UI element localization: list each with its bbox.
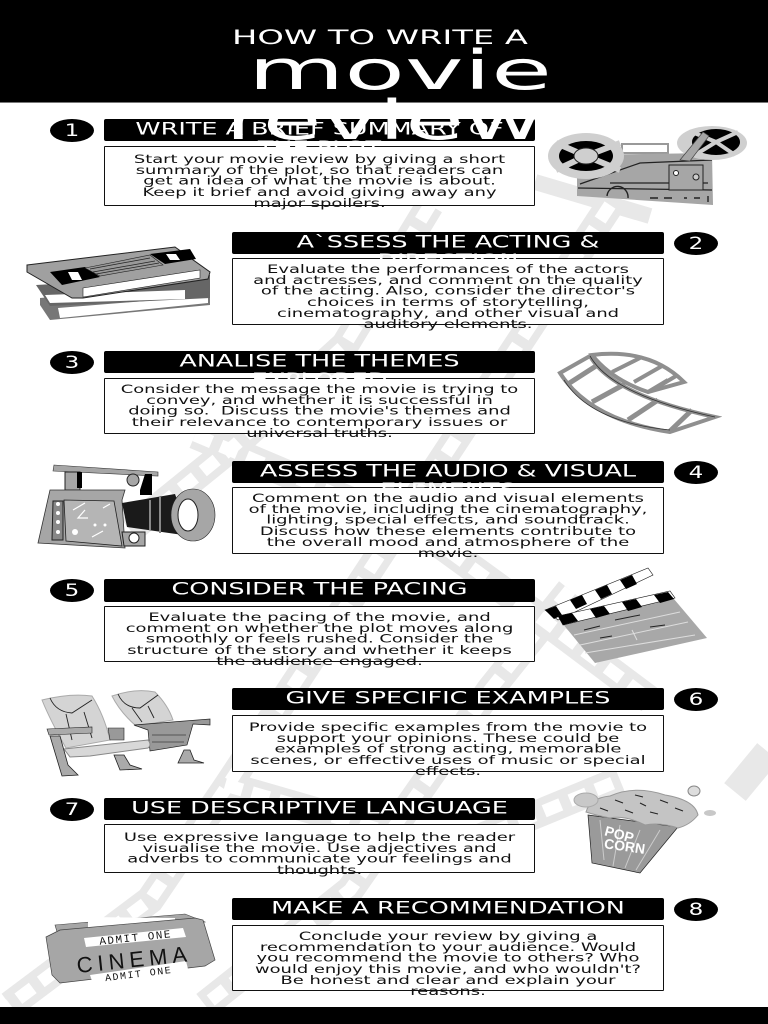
header band bbox=[0, 0, 768, 103]
step 5 number bbox=[50, 579, 94, 602]
step 4 body box bbox=[232, 487, 664, 554]
step 7 number: 7 bbox=[65, 800, 79, 819]
step 2 heading bbox=[296, 233, 599, 270]
step 5 bar bbox=[104, 579, 535, 602]
icon: video camera bbox=[38, 464, 216, 548]
step 7 text bbox=[124, 830, 516, 877]
step 2 text bbox=[253, 262, 643, 331]
step 6 text: scenes, or effective uses of music or special bbox=[250, 753, 646, 767]
step 4 text: the overall mood and atmosphere of the bbox=[267, 535, 629, 549]
step 4 number: 4 bbox=[689, 463, 703, 482]
step 1 heading: THE PLOT bbox=[258, 138, 381, 157]
step 3 text: Consider the message the movie is trying to bbox=[121, 382, 518, 396]
step 3 bar bbox=[104, 351, 535, 373]
step 8 number: 8 bbox=[689, 900, 703, 919]
step 7 text: thoughts. bbox=[277, 863, 362, 877]
step 3 number: 3 bbox=[65, 353, 79, 372]
step 8 text: Be honest and clear and explain your bbox=[281, 973, 615, 987]
step 4 heading: ASSESS THE AUDIO & VISUAL bbox=[260, 462, 636, 481]
popcorn label bbox=[603, 823, 646, 857]
step 6 panel: give specific examples bbox=[232, 688, 718, 778]
step 8 body box bbox=[232, 925, 664, 991]
step 3 text: doing so. Discuss the movie's themes and bbox=[128, 404, 511, 418]
step 6 number: 6 bbox=[689, 690, 703, 709]
step 2 text: Evaluate the performances of the actors bbox=[267, 262, 629, 276]
step 7 body box bbox=[104, 824, 535, 873]
step 1 number: 1 bbox=[65, 121, 79, 140]
step 4 text: of the movie, including the cinematography, bbox=[249, 502, 647, 516]
icon: cinema tickets bbox=[46, 914, 216, 985]
step 2 heading: DIRECTION bbox=[377, 251, 519, 270]
step 8 text bbox=[255, 929, 641, 998]
step 1 number bbox=[50, 119, 94, 142]
step 6 number bbox=[674, 688, 718, 711]
step 2 number: 2 bbox=[689, 234, 703, 253]
step 5 body box bbox=[104, 606, 535, 662]
step 7 heading: USE DESCRIPTIVE LANGUAGE bbox=[131, 799, 508, 818]
step 2 body box bbox=[232, 258, 664, 325]
step 7 text: adverbs to communicate your feelings and bbox=[127, 852, 512, 866]
step 5 text: the audience engaged. bbox=[216, 654, 423, 668]
step 1 text bbox=[134, 152, 505, 210]
step 6 text: examples of strong acting, memorable bbox=[275, 742, 621, 756]
step 2 text: cinematography, and other visual and bbox=[277, 306, 619, 320]
icon: curled film reel strip bbox=[557, 352, 722, 434]
step 1 text: Start your movie review by giving a short bbox=[134, 152, 505, 166]
step 3 text: universal truths. bbox=[246, 426, 393, 440]
step 2 text: and actresses, and comment on the quality bbox=[253, 273, 643, 287]
step 1 text: get an idea of what the movie is about. bbox=[143, 174, 496, 188]
step 8 heading: MAKE A RECOMMENDATION bbox=[271, 899, 625, 918]
step 7 text: visualise the movie. Use adjectives and bbox=[142, 841, 496, 855]
step 2 heading: A`SSESS THE ACTING & bbox=[297, 233, 599, 252]
ticket lower text: ADMIT ONE bbox=[105, 966, 173, 985]
step 2 text: choices in terms of storytelling, bbox=[307, 295, 589, 309]
step 6 body box bbox=[232, 715, 664, 772]
step 5 text: Evaluate the pacing of the movie, and bbox=[148, 610, 491, 624]
step 3 heading: ANALISE THE THEMES bbox=[179, 352, 460, 371]
step 8 bar bbox=[232, 898, 664, 920]
popcorn label: CORN bbox=[603, 835, 646, 857]
step 4 text: movie. bbox=[418, 546, 478, 560]
step 2 text: auditory elements. bbox=[363, 317, 532, 331]
step 1 heading: WRITE A BRIEF SUMMARY OF bbox=[135, 120, 504, 139]
title bbox=[225, 26, 552, 152]
step 4 number bbox=[674, 461, 718, 484]
step 3 text: their relevance to contemporary issues or bbox=[132, 415, 507, 429]
icon: cinema seats bbox=[41, 690, 210, 776]
ticket text: ADMIT ONE bbox=[99, 929, 173, 949]
step 7 panel: use descriptive language bbox=[50, 798, 535, 877]
step 8 text: you recommend the movie to others? Who bbox=[256, 951, 640, 965]
step 5 heading: CONSIDER THE PACING bbox=[171, 580, 468, 599]
step 7 number bbox=[50, 798, 94, 821]
step 1 text: major spoilers. bbox=[253, 196, 386, 210]
step 6 text bbox=[249, 720, 647, 778]
title word: movie: movie bbox=[248, 39, 552, 102]
step 2 panel: assess the acting bbox=[232, 232, 718, 331]
step 1 body box bbox=[104, 146, 535, 206]
step 3 body box bbox=[104, 378, 535, 434]
step 6 text: support your opinions. These could be bbox=[277, 731, 619, 745]
step 5 panel: consider the pacing bbox=[50, 579, 535, 668]
step 5 number: 5 bbox=[65, 581, 79, 600]
step 8 text: reasons. bbox=[410, 984, 486, 998]
ticket cinema word: CINEMA bbox=[75, 941, 193, 978]
popcorn label: POP bbox=[603, 823, 636, 846]
step 1 text: summary of the plot, so that readers can bbox=[136, 163, 503, 177]
footer band bbox=[0, 1007, 768, 1024]
icon: stacked VHS tapes bbox=[26, 246, 211, 320]
step 1 panel: write a brief summary bbox=[50, 119, 535, 210]
step 4 text: lighting, special effects, and soundtrack. bbox=[266, 513, 630, 527]
step 3 heading bbox=[179, 352, 460, 389]
step 4 heading: ELEMENTS bbox=[380, 480, 516, 499]
step 4 text: Discuss how these elements contribute to bbox=[260, 524, 636, 538]
step 5 text bbox=[126, 610, 513, 668]
icon: clapperboard bbox=[544, 568, 707, 663]
step 3 heading: EXPLORED bbox=[252, 370, 387, 389]
step 4 text: Comment on the audio and visual elements bbox=[252, 491, 644, 505]
step 8 text: would enjoy this movie, and who wouldn't? bbox=[255, 962, 641, 976]
step 8 text: Conclude your review by giving a bbox=[299, 929, 597, 943]
icon: film projector bbox=[548, 126, 747, 205]
step 7 text: Use expressive language to help the reader bbox=[124, 830, 515, 844]
step 3 panel: analyse the themes bbox=[50, 351, 535, 440]
step 6 heading: GIVE SPECIFIC EXAMPLES bbox=[286, 689, 610, 708]
step 5 text: comment on whether the plot moves along bbox=[126, 621, 513, 635]
step 2 text: of the acting. Also, consider the director's bbox=[261, 284, 635, 298]
step 4 panel: audio and visual bbox=[232, 461, 718, 560]
step 8 panel: make a recommendation bbox=[232, 898, 718, 998]
step 7 bar bbox=[104, 798, 535, 820]
step 6 text: effects. bbox=[415, 764, 481, 778]
step 8 text: recommendation to your audience. Would bbox=[260, 940, 636, 954]
step 4 heading bbox=[260, 462, 636, 499]
step 8 number bbox=[674, 898, 718, 921]
icon: popcorn box bbox=[574, 786, 716, 874]
step 5 text: structure of the story and whether it keeps bbox=[127, 643, 512, 657]
step 3 number bbox=[50, 351, 94, 374]
step 3 text bbox=[121, 382, 518, 440]
step 1 text: Keep it brief and avoid giving away any bbox=[142, 185, 497, 199]
title kicker: HOW TO WRITE A bbox=[232, 26, 528, 49]
title word: review: review bbox=[225, 88, 543, 152]
step 4 text bbox=[249, 491, 647, 560]
step 5 text: smoothly or feels rushed. Consider the bbox=[146, 632, 493, 646]
step 1 heading bbox=[135, 120, 504, 157]
step 2 number bbox=[674, 232, 718, 255]
step 1 bar bbox=[104, 119, 535, 141]
step 3 text: convey, and whether it is successful in bbox=[146, 393, 493, 407]
step 4 bar bbox=[232, 461, 664, 483]
step 6 text: Provide specific examples from the movie to bbox=[249, 720, 647, 734]
step 2 bar bbox=[232, 232, 664, 254]
step 6 bar bbox=[232, 688, 664, 710]
